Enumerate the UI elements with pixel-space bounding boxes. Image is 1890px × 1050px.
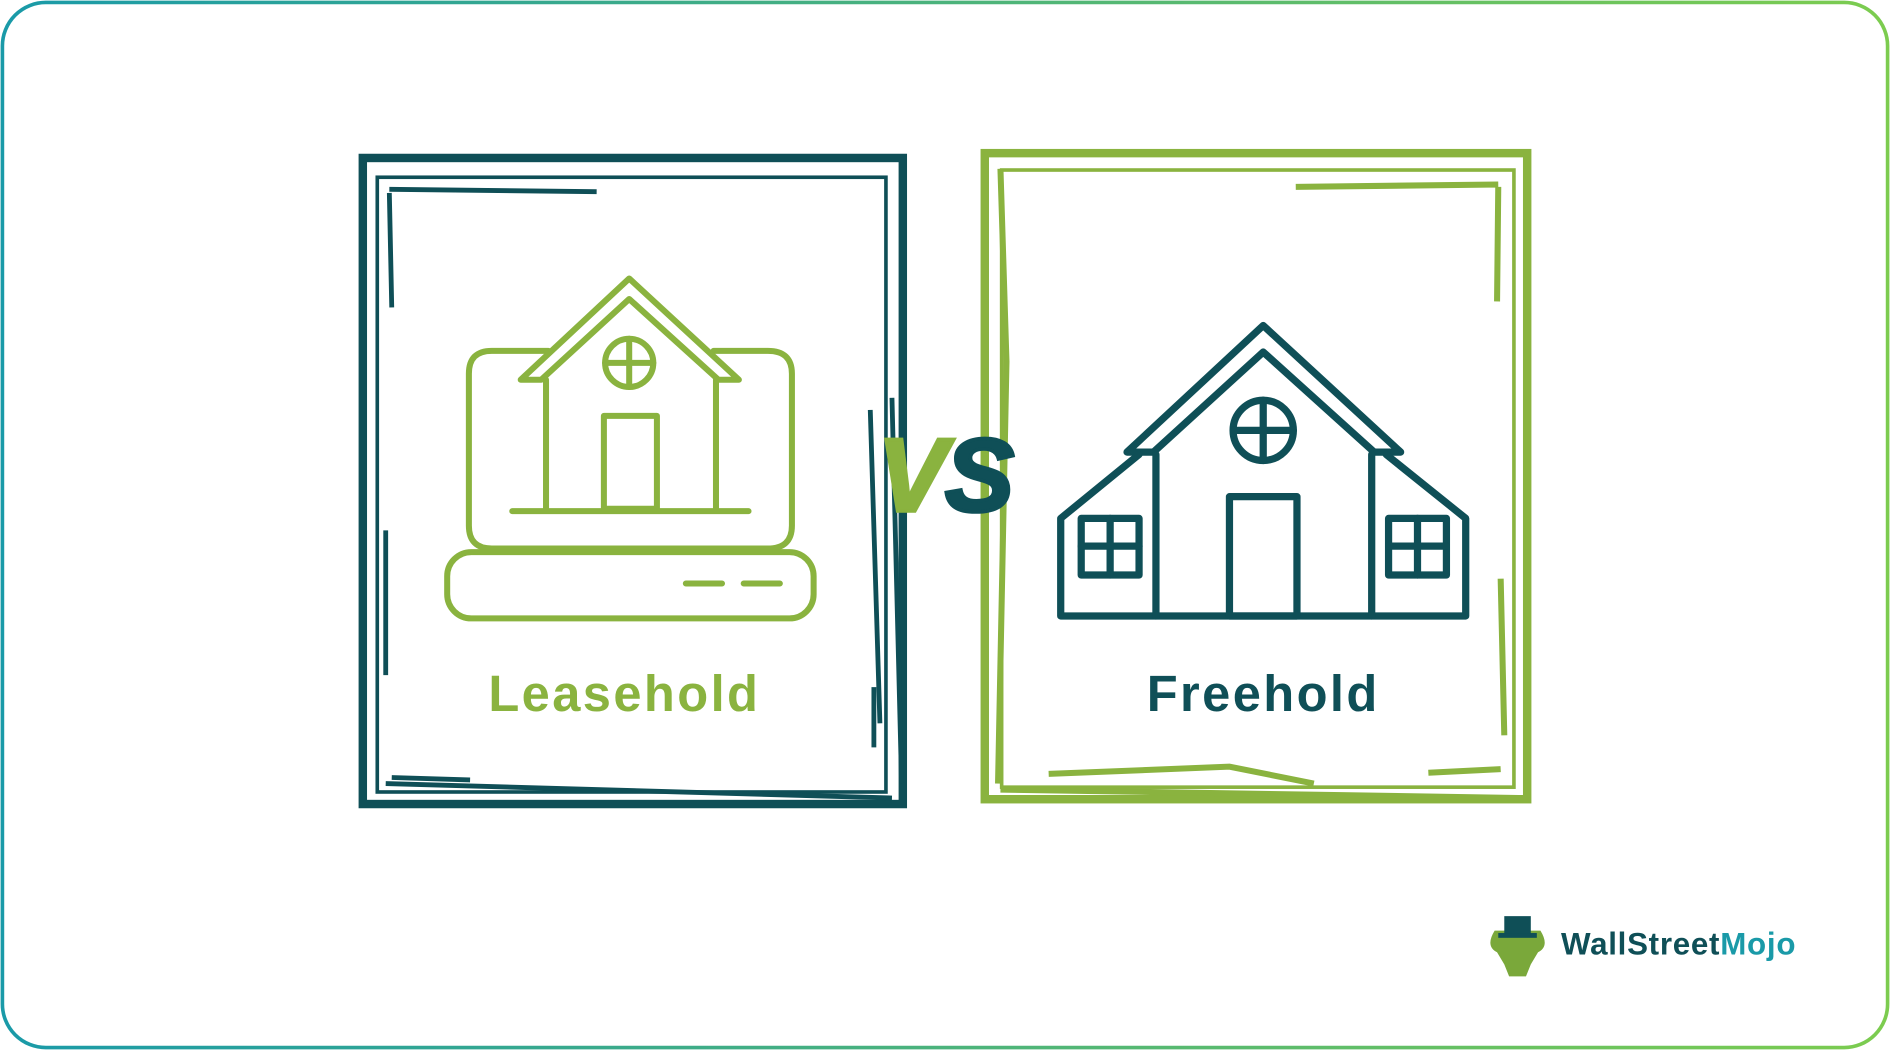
icon: laptop house [447, 279, 814, 618]
heading: Leasehold: Leasehold [488, 665, 760, 722]
panel: leasehold frame [363, 158, 903, 804]
logo: WallStreetMojo [1561, 927, 1796, 962]
text: VS: S [945, 417, 1014, 533]
text: VS [878, 417, 1014, 533]
text: VS: V [878, 417, 954, 533]
panel: freehold frame [985, 153, 1527, 799]
logo [1490, 916, 1796, 976]
heading: Freehold: Freehold [1147, 665, 1380, 722]
icon: house [1061, 326, 1466, 616]
